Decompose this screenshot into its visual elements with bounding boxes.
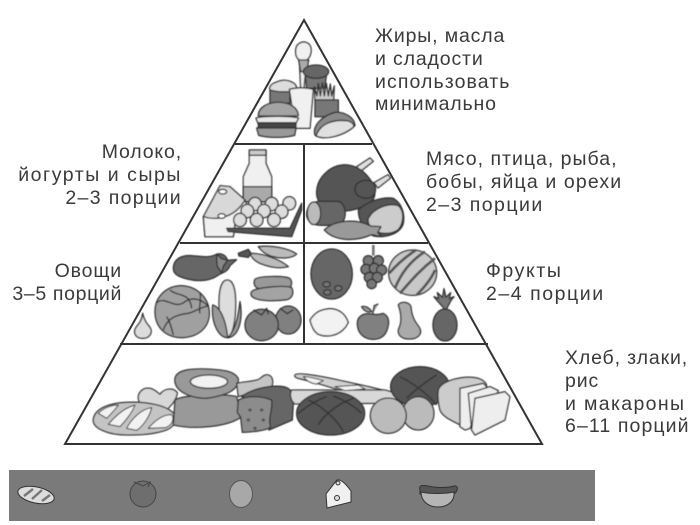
label: dairy: Молоко,: [102, 141, 182, 163]
label: bread and grains: и макароны: [565, 393, 685, 415]
label: meat: бобы, яйца и орехи: [426, 171, 622, 193]
label: meat: 2–3 порции: [426, 194, 544, 216]
tier 3 foods: fruits: [310, 245, 457, 341]
icon: bread: [16, 483, 56, 507]
label: meat: Мясо, птица, рыба,: [426, 148, 618, 170]
legend bar: [9, 470, 595, 521]
label: fats, oils and sweets: Жиры, масла: [375, 25, 505, 47]
label: vegetables: 3–5 порций: [12, 283, 122, 305]
tier 2 foods: meat and fish: [307, 158, 404, 239]
label: dairy: 2–3 порции: [65, 187, 182, 209]
label: bread and grains: Хлеб, злаки,: [565, 347, 688, 369]
label: fruits: Фрукты: [486, 260, 562, 282]
tier 2 foods: dairy: [203, 150, 302, 237]
icon: hot dog: [420, 485, 457, 507]
icon: orange: [230, 480, 252, 508]
food pyramid outline: [65, 20, 542, 444]
tier 3 foods: vegetables: [135, 246, 301, 341]
label: dairy: йогурты и сыры: [18, 164, 182, 186]
label: fruits: 2–4 порции: [486, 283, 605, 305]
tier 1 foods: fats and sweets: [256, 42, 355, 138]
label: fats, oils and sweets: минимально: [375, 93, 497, 115]
label: bread and grains: 6–11 порций: [565, 415, 690, 437]
label: fats, oils and sweets: использовать: [375, 71, 511, 93]
label: vegetables: Овощи: [55, 260, 122, 282]
icon: tomato: [130, 481, 156, 507]
tier 4 foods: breads and cereals: [93, 367, 510, 435]
label: fats, oils and sweets: и сладости: [375, 48, 484, 70]
icon: cheese: [326, 480, 351, 508]
label: bread and grains: рис: [565, 370, 599, 392]
